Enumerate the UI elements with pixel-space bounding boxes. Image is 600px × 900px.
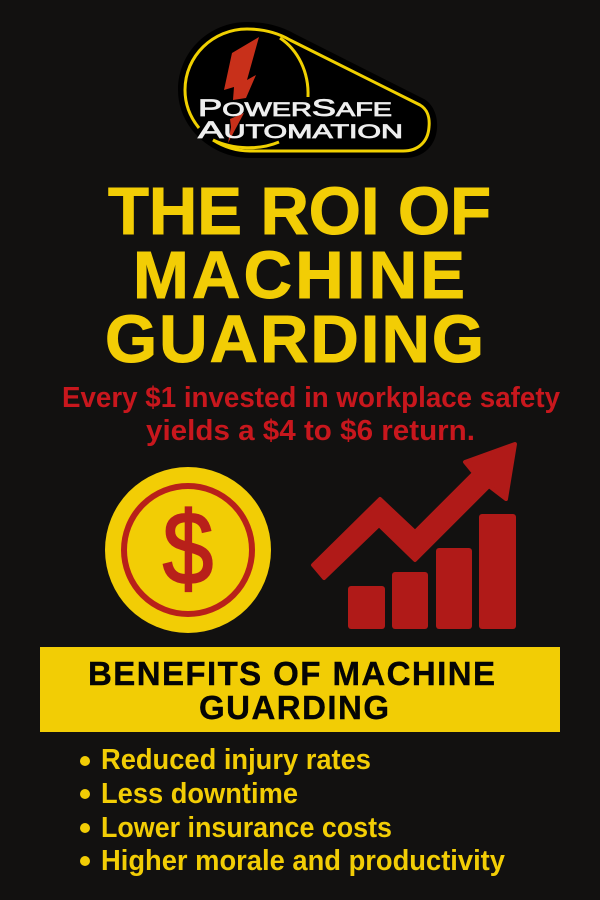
title: MACHINE [133, 238, 465, 313]
benefits list [80, 744, 505, 877]
title: THE ROI OF [108, 174, 491, 249]
subtitle: yields a $4 to $6 return. [146, 415, 475, 447]
subtitle: Every $1 invested in workplace safety [62, 382, 560, 414]
logo: PowerSafe Automation [178, 22, 437, 158]
logo: PowerSafe Automation: P OWER S AFE [198, 95, 392, 122]
banner: benefits heading [40, 647, 560, 732]
icon: dollar coin: $ [163, 491, 213, 606]
logo: PowerSafe Automation: A UTOMATION [198, 117, 403, 144]
icon: rising bar chart with arrow [313, 444, 516, 629]
benefits list: Less downtime [101, 778, 298, 810]
icon: dollar coin [105, 467, 271, 633]
benefits list: Lower insurance costs [101, 812, 392, 844]
subtitle [62, 382, 560, 447]
benefits list: Higher morale and productivity [101, 845, 505, 877]
title [105, 174, 491, 377]
banner: benefits heading: GUARDING [199, 689, 389, 726]
title: GUARDING [105, 302, 484, 377]
banner: benefits heading: BENEFITS OF MACHINE [88, 655, 495, 692]
benefits list: Reduced injury rates [101, 744, 371, 776]
